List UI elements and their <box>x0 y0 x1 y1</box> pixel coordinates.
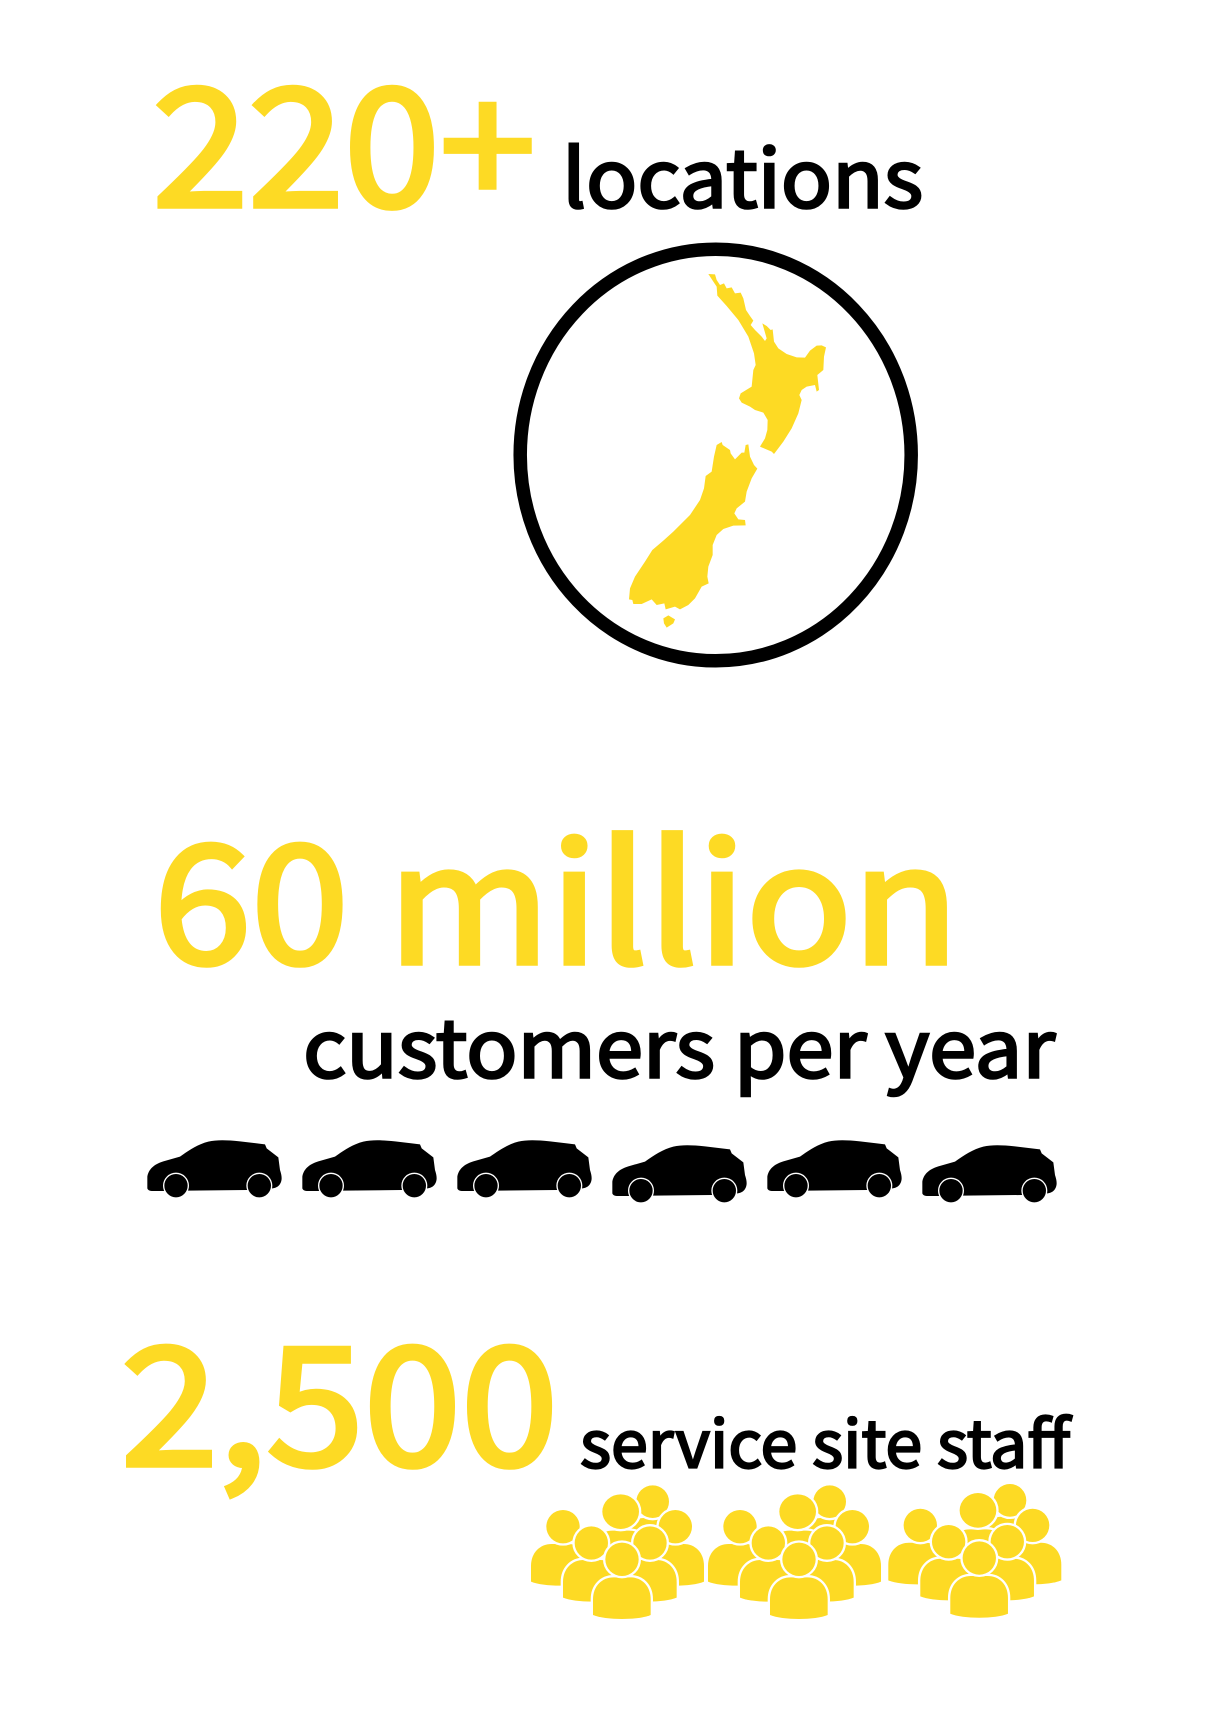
icon: people group 3 <box>888 1484 1061 1618</box>
icon: people group 2 <box>708 1485 881 1619</box>
icon row: staff groups <box>531 1484 1061 1619</box>
stat: 2,500: 2,500 <box>121 1276 558 1513</box>
icon: car 5 <box>767 1140 902 1198</box>
circle outline <box>520 249 911 661</box>
map: New Zealand <box>629 274 826 628</box>
label: service site staff: service site staff <box>580 1392 1072 1486</box>
label: customers per year: customers per year <box>303 986 1056 1102</box>
icon: people group 1 <box>531 1485 704 1619</box>
icon row: cars <box>147 1140 1057 1203</box>
label: locations: locations <box>562 116 923 232</box>
stat: 220+: 220+ <box>152 17 536 254</box>
icon: car 4 <box>612 1145 747 1203</box>
stat: 60 million: 60 million <box>154 774 959 1011</box>
icon: New Zealand map in circle <box>520 249 911 661</box>
icon: car 6 <box>922 1145 1057 1203</box>
icon: car 2 <box>302 1140 437 1198</box>
icon: car 3 <box>457 1140 592 1198</box>
icon: car 1 <box>147 1140 282 1198</box>
